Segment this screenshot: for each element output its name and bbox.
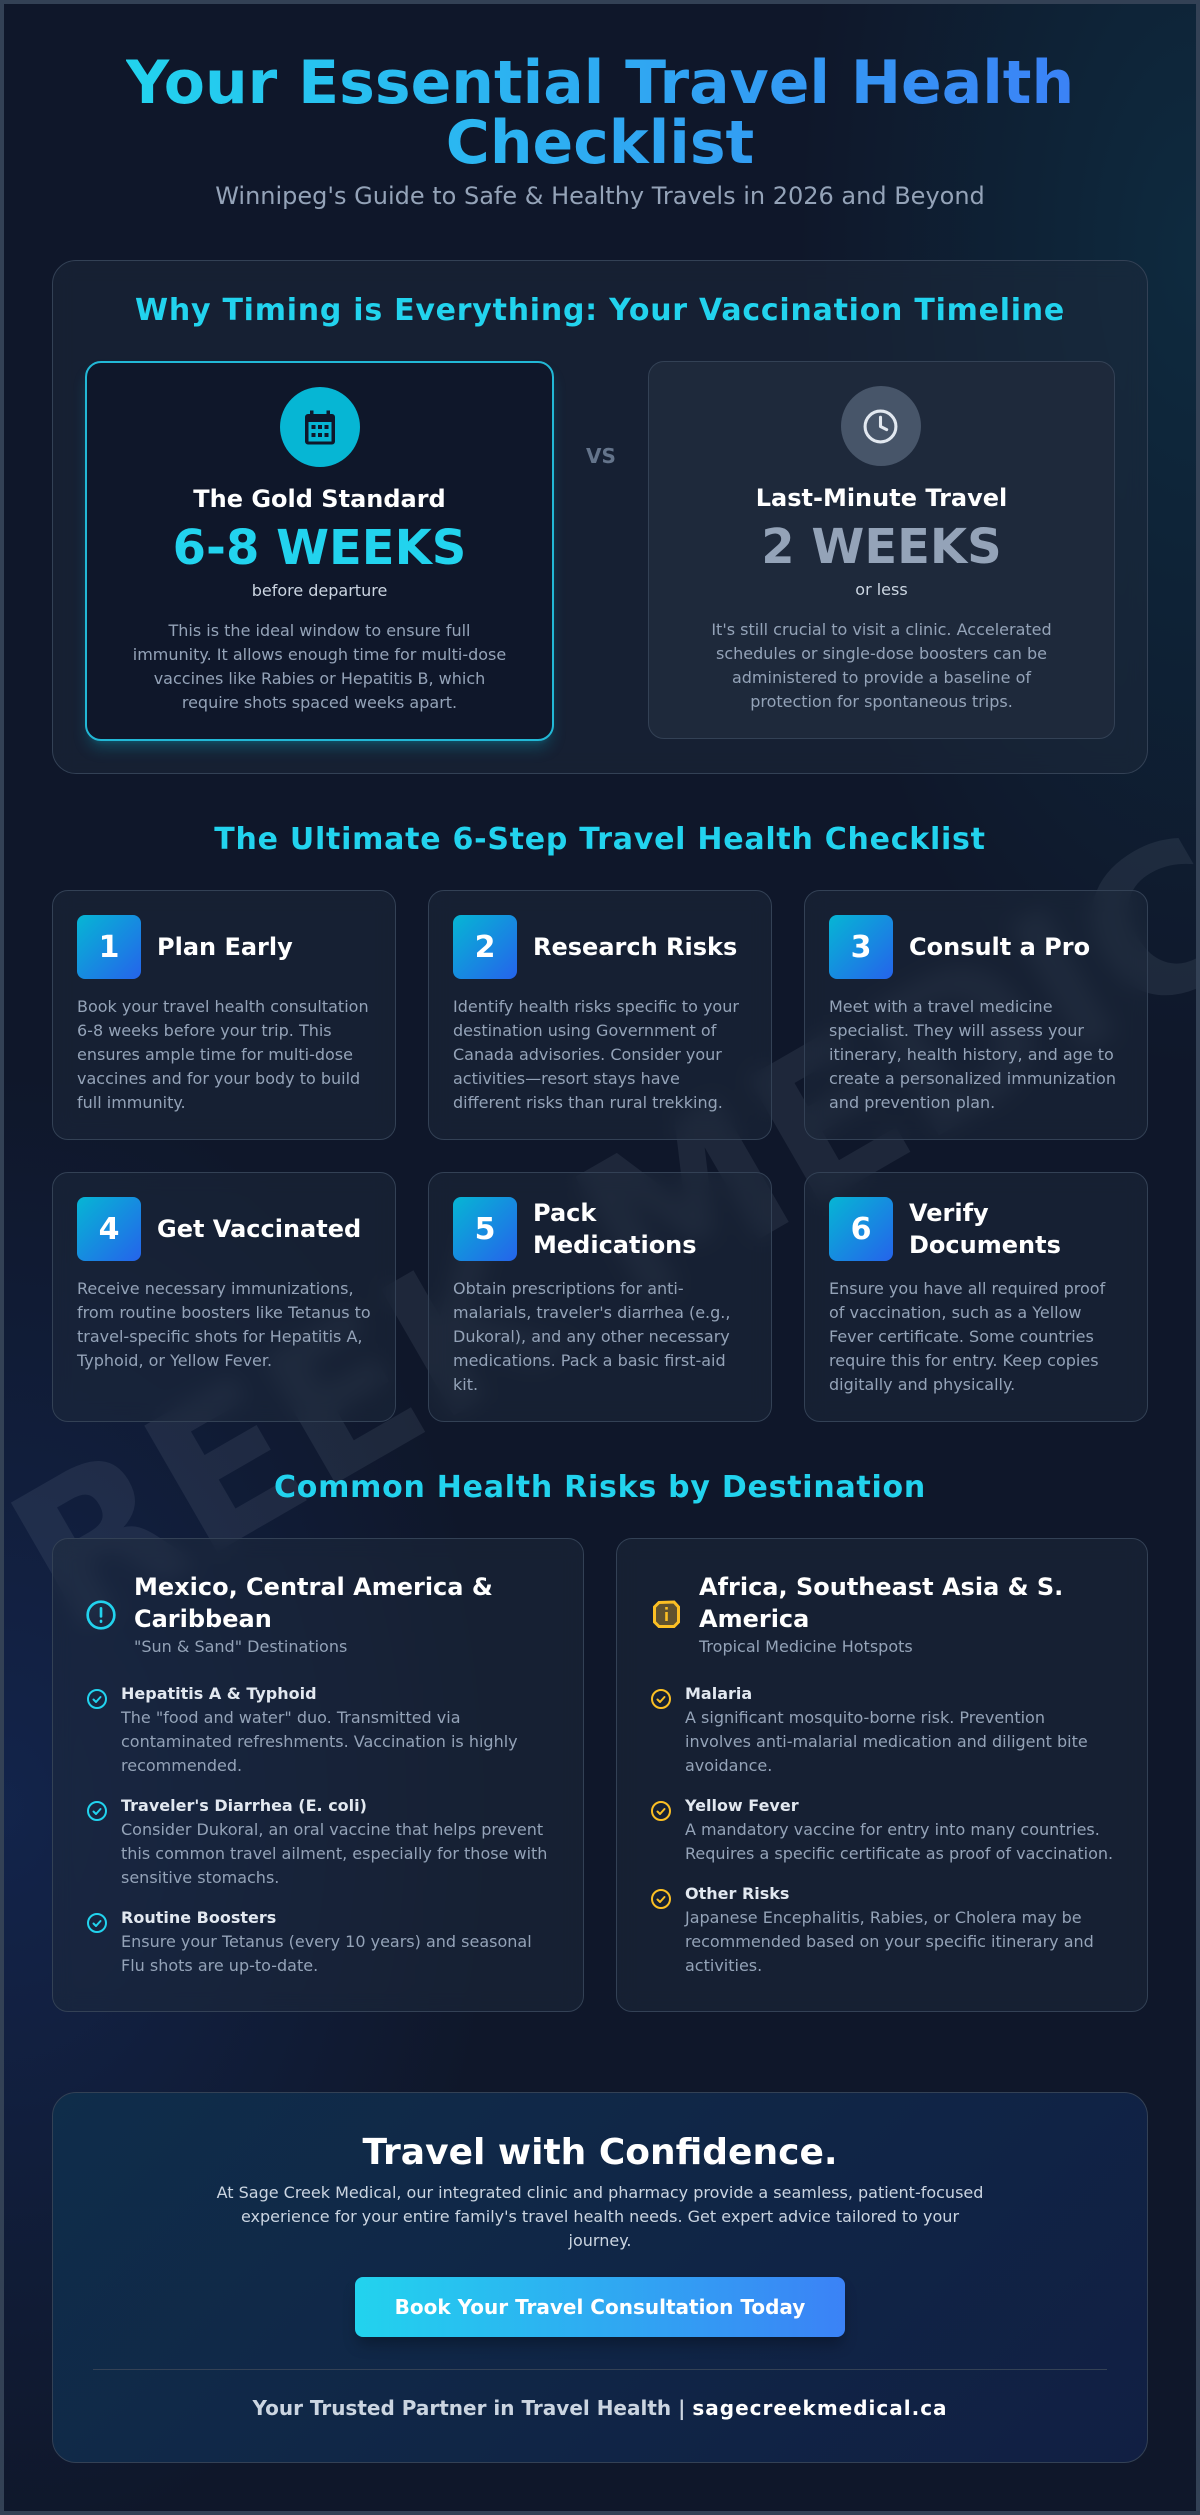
step 1: 1 (99, 930, 119, 964)
panel: call to action (52, 2092, 1148, 2463)
panel: vaccination timeline (52, 260, 1148, 774)
card: last-minute travel: protection for spontaneous trips. (750, 692, 1013, 711)
region title: Caribbean (134, 1605, 272, 1633)
card: last-minute travel (648, 361, 1115, 739)
step 5: medications. Pack a basic first-aid (453, 1351, 726, 1370)
risk: diarrhea: Consider Dukoral, an oral vaccine that helps prevent (121, 1820, 543, 1839)
risk: other: Japanese Encephalitis, Rabies, or Cholera may be (685, 1908, 1082, 1927)
step 3 (804, 890, 1148, 1140)
region title: Mexico, Central America & (134, 1573, 493, 1601)
step 6: Fever certificate. Some countries (829, 1327, 1094, 1346)
step 5: kit. (453, 1375, 478, 1394)
risk: other (651, 1884, 1094, 1975)
risk: hepatitis: The "food and water" duo. Transmitted via (121, 1708, 461, 1727)
button (355, 2277, 845, 2337)
step 2: Canada advisories. Consider your (453, 1045, 722, 1064)
footer text: Your Trusted Partner in Travel Health | sagecreekmedical.ca (252, 2396, 948, 2420)
cta text: experience for your entire family's travel health needs. Get expert advice tailored to your (241, 2207, 959, 2226)
card: gold standard: This is the ideal window to ensure full (168, 621, 470, 640)
step 5 (428, 1172, 772, 1422)
step 3: itinerary, health history, and age to (829, 1045, 1114, 1064)
risk: malaria: A significant mosquito-borne risk. Prevention (685, 1708, 1045, 1727)
step 5: 5 (475, 1212, 495, 1246)
icon: calendar (280, 387, 360, 467)
risk: other: recommended based on your specific itinerary and (685, 1932, 1094, 1951)
cta text: journey. (569, 2231, 631, 2250)
risk: yellow fever: Requires a specific certificate as proof of vaccination. (685, 1844, 1113, 1863)
risk: boosters: Ensure your Tetanus (every 10 years) and seasonal (121, 1932, 532, 1951)
step 6 (804, 1172, 1148, 1422)
risk: hepatitis: recommended. (121, 1756, 242, 1775)
region title (699, 1573, 1063, 1633)
step 1 (52, 890, 396, 1140)
step 6: require this for entry. Keep copies (829, 1351, 1099, 1370)
step 3: create a personalized immunization (829, 1069, 1116, 1088)
step 2 (428, 890, 772, 1140)
card: gold standard: vaccines like Rabies or Hepatitis B, which (154, 669, 485, 688)
heading: risks: Common Health Risks by Destination (274, 1470, 926, 1505)
step 2: destination using Government of (453, 1021, 716, 1040)
panel: sun and sand destinations (52, 1538, 584, 2012)
card: gold standard: immunity. It allows enough time for multi-dose (133, 645, 506, 664)
card: last-minute travel: Last-Minute Travel (756, 484, 1007, 512)
step 3: 3 (851, 930, 871, 964)
step 3: and prevention plan. (829, 1093, 995, 1112)
region title: Africa, Southeast Asia & S. (699, 1573, 1063, 1601)
step 5: Obtain prescriptions for anti- (453, 1279, 684, 1298)
title: Checklist (446, 108, 754, 178)
label: versus: VS (586, 444, 616, 468)
risk: boosters (87, 1908, 532, 1975)
cta text (216, 2183, 983, 2250)
card: gold standard: 6-8 WEEKS (173, 520, 466, 576)
risk: diarrhea (87, 1796, 547, 1887)
icon: warning octagon (653, 1600, 680, 1628)
step 4: from routine boosters like Tetanus to (77, 1303, 371, 1322)
region subtitle: Tropical Medicine Hotspots (699, 1637, 913, 1656)
panel: tropical hotspots (616, 1538, 1148, 2012)
card: last-minute travel: schedules or single-dose boosters can be (716, 644, 1047, 663)
step 2: different risks than rural trekking. (453, 1093, 723, 1112)
card: gold standard (85, 361, 554, 741)
risk: diarrhea: sensitive stomachs. (121, 1868, 279, 1887)
title (126, 48, 1074, 178)
card: gold standard: require shots spaced weeks apart. (182, 693, 457, 712)
card: last-minute travel: It's still crucial to visit a clinic. Accelerated (711, 620, 1052, 639)
step 4: travel-specific shots for Hepatitis A, (77, 1327, 362, 1346)
step 3: Consult a Pro (909, 933, 1090, 961)
subtitle: Winnipeg's Guide to Safe & Healthy Travels in 2026 and Beyond (215, 182, 985, 210)
risk: malaria (651, 1684, 1088, 1775)
step 1: Book your travel health consultation (77, 997, 369, 1016)
step 5: Pack (533, 1199, 596, 1227)
step 4: Get Vaccinated (157, 1215, 361, 1243)
step 6: Documents (909, 1231, 1061, 1259)
step 4: 4 (99, 1212, 119, 1246)
step 2: activities—resort stays have (453, 1069, 680, 1088)
step 5: Medications (533, 1231, 697, 1259)
step 2: 2 (475, 930, 495, 964)
step 1: 6-8 weeks before your trip. This (77, 1021, 332, 1040)
step 5: malarials, traveler's diarrhea (e.g., (453, 1303, 730, 1322)
cta text: At Sage Creek Medical, our integrated clinic and pharmacy provide a seamless, patient-focused (217, 2183, 983, 2202)
step 1: Plan Early (157, 933, 293, 961)
button: Book Your Travel Consultation Today (395, 2295, 805, 2319)
icon: clock (840, 386, 920, 466)
divider (93, 2369, 1107, 2370)
risk: malaria: involves anti-malarial medication and diligent bite (685, 1732, 1088, 1751)
step 5: Dukoral), and any other necessary (453, 1327, 730, 1346)
risk: yellow fever: Yellow Fever (685, 1796, 799, 1815)
risk: malaria: Malaria (685, 1684, 752, 1703)
step 2: Identify health risks specific to your (453, 997, 739, 1016)
step 6: 6 (851, 1212, 871, 1246)
risk: malaria: avoidance. (685, 1756, 772, 1775)
heading: checklist: The Ultimate 6-Step Travel Health Checklist (214, 822, 986, 857)
risk: boosters: Routine Boosters (121, 1908, 276, 1927)
region title: America (699, 1605, 809, 1633)
region subtitle: "Sun & Sand" Destinations (134, 1637, 347, 1656)
step 2: Research Risks (533, 933, 737, 961)
step 6: Verify (909, 1199, 989, 1227)
step 1: full immunity. (77, 1093, 186, 1112)
cta heading: Travel with Confidence. (362, 2132, 838, 2173)
region title (134, 1573, 493, 1633)
risk: other: activities. (685, 1956, 762, 1975)
risk: hepatitis: contaminated refreshments. Vaccination is highly (121, 1732, 518, 1751)
risk: yellow fever: A mandatory vaccine for entry into many countries. (685, 1820, 1100, 1839)
step 6: of vaccination, such as a Yellow (829, 1303, 1081, 1322)
card: last-minute travel: 2 WEEKS (761, 519, 1002, 575)
card: gold standard: The Gold Standard (193, 485, 446, 513)
title: Your Essential Travel Health (126, 48, 1074, 118)
risk: diarrhea: Traveler's Diarrhea (E. coli) (121, 1796, 367, 1815)
step 1: vaccines and for your body to build (77, 1069, 360, 1088)
risk: boosters: Flu shots are up-to-date. (121, 1956, 318, 1975)
icon: alert (86, 1600, 116, 1630)
step 6: digitally and physically. (829, 1375, 1015, 1394)
risk: yellow fever (651, 1796, 1113, 1863)
card: gold standard: before departure (252, 581, 387, 600)
heading: timeline: Why Timing is Everything: Your Vaccination Timeline (135, 293, 1065, 328)
step 1: ensures ample time for multi-dose (77, 1045, 353, 1064)
step 4 (52, 1172, 396, 1422)
risk: hepatitis: Hepatitis A & Typhoid (121, 1684, 317, 1703)
step 3: Meet with a travel medicine (829, 997, 1053, 1016)
step 6: Ensure you have all required proof (829, 1279, 1105, 1298)
card: last-minute travel: or less (855, 580, 908, 599)
card: last-minute travel: administered to provide a baseline of (732, 668, 1031, 687)
step 3: specialist. They will assess your (829, 1021, 1084, 1040)
risk: diarrhea: this common travel ailment, especially for those with (121, 1844, 547, 1863)
risk: other: Other Risks (685, 1884, 789, 1903)
step 4: Typhoid, or Yellow Fever. (77, 1351, 272, 1370)
step 4: Receive necessary immunizations, (77, 1279, 354, 1298)
risk: hepatitis (87, 1684, 518, 1775)
